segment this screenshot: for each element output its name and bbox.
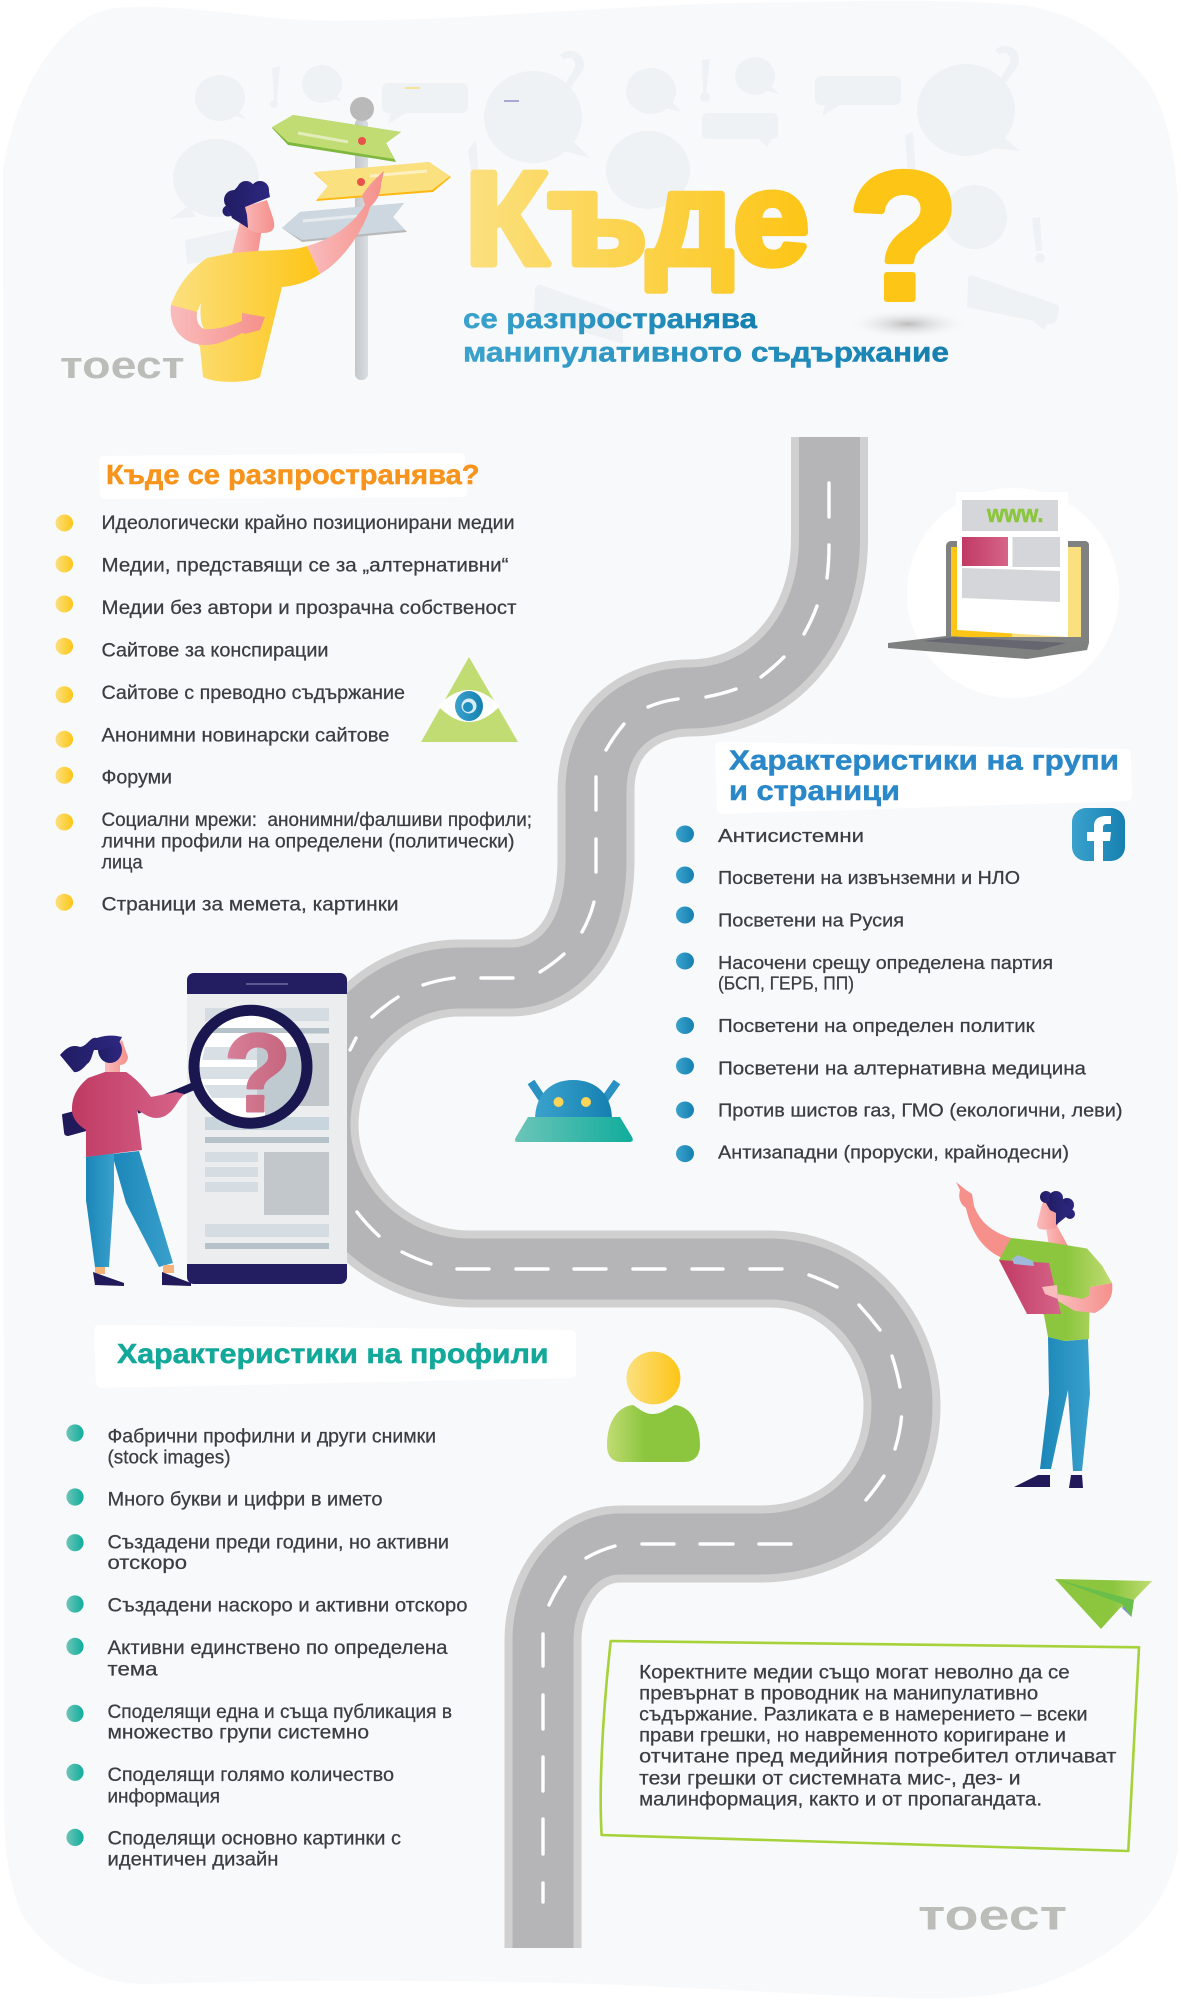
list: where: Страници за мемета, картинки — [102, 895, 398, 916]
subtitle: се разпространява — [463, 303, 757, 334]
icon: facebook — [1072, 808, 1125, 861]
panel: groups and pages — [676, 744, 1127, 1163]
icon: profile person — [607, 1352, 700, 1462]
phone — [187, 973, 347, 1284]
callout text: тези грешки от системната мис-, дез- и — [639, 1768, 1021, 1789]
pants — [1040, 1337, 1090, 1471]
list: profiles: Споделящи основно картинки с — [108, 1829, 401, 1850]
callout text: прави грешки, но навременното коригиране и — [639, 1726, 1066, 1747]
icon: laptop with website — [888, 488, 1119, 698]
magnifier handle — [137, 1086, 194, 1110]
callout border — [601, 1641, 1139, 1851]
list: groups: Против шистов газ, ГМО (екологични, леви) — [718, 1100, 1122, 1120]
callout text: превърнат в проводник на манипулативно — [639, 1683, 1038, 1704]
list: where: Сайтове за конспирации — [102, 640, 328, 662]
list: profiles: отскоро — [108, 1553, 187, 1574]
list: profiles: тема — [108, 1660, 158, 1680]
pole — [350, 97, 374, 380]
man: shirt — [171, 246, 320, 382]
illustration: man with clipboard — [956, 1182, 1112, 1488]
list: profiles: идентичен дизайн — [108, 1850, 278, 1871]
bullets: teal — [66, 1424, 84, 1846]
clipboard — [999, 1255, 1061, 1314]
hair — [1040, 1191, 1075, 1225]
list: where: лични профили на определени (политически) — [102, 831, 514, 852]
title: question mark: ? — [848, 134, 959, 338]
sign: yellow — [314, 162, 451, 201]
list: groups: Посветени на Русия — [718, 911, 904, 931]
list: where: Анонимни новинарски сайтове — [102, 725, 390, 746]
callout text: малинформация, както и от пропагандата. — [639, 1789, 1042, 1810]
list: groups: Антисистемни — [718, 826, 864, 846]
shadow under question mark — [846, 309, 970, 339]
logo: bottom: тоест — [918, 1892, 1067, 1940]
list: groups: Посветени на определен политик — [718, 1016, 1035, 1036]
neck and face — [1037, 1196, 1068, 1248]
list: groups: Антизападни (проруски, крайнодесни) — [718, 1143, 1069, 1163]
list: where: Медии, представящи се за „алтернативни“ — [102, 556, 508, 576]
road — [320, 437, 902, 1948]
speech bubbles background — [170, 46, 1059, 344]
man: lower arm — [171, 305, 265, 345]
list: profiles: Фабрични профилни и други снимки — [108, 1426, 436, 1448]
list: profiles: информация — [108, 1787, 220, 1808]
gap between arm and torso — [197, 303, 204, 329]
man: neck and face — [232, 200, 274, 257]
icon: android ufo — [515, 1080, 633, 1142]
logo: top: тоест — [60, 345, 184, 387]
woman: legs — [86, 1151, 173, 1267]
list: where: Идеологически крайно позиционирани медии — [102, 513, 514, 534]
callout text: съдържание. Разликата е в намерението – всеки — [639, 1704, 1088, 1725]
lower arm — [1058, 1283, 1112, 1313]
panel: profiles — [66, 1330, 700, 1871]
list: where: Форуми — [102, 768, 172, 789]
heading: where: Къде се разпространява? — [106, 459, 480, 490]
woman: torso — [72, 1072, 184, 1157]
bullets: blue — [676, 826, 694, 1162]
list: profiles: Създадени наскоро и активни отскоро — [108, 1596, 468, 1617]
callout — [601, 1641, 1139, 1851]
woman: shoes — [93, 1265, 191, 1286]
list: profiles: Създадени преди години, но активни — [108, 1532, 449, 1554]
woman: face — [105, 1040, 128, 1073]
sign: green — [272, 115, 401, 162]
shoes — [1014, 1475, 1083, 1488]
small dashes — [405, 87, 519, 102]
list: groups: Насочени срещу определена партия — [718, 953, 1053, 973]
subtitle: манипулативното съдържание — [463, 336, 949, 368]
panel: where it spreads — [56, 458, 532, 916]
list: profiles: (stock images) — [108, 1448, 230, 1468]
callout text — [639, 1662, 1117, 1810]
woman: hair — [60, 1036, 122, 1072]
list: where: Сайтове с преводно съдържание — [102, 683, 405, 704]
bullets: yellow — [56, 514, 73, 911]
icon: eye triangle — [421, 657, 518, 742]
list: profiles: Активни единствено по определена — [108, 1638, 448, 1659]
list: where: лица — [102, 853, 143, 874]
title: kade: Къде — [465, 145, 809, 292]
lens — [194, 1010, 307, 1135]
green shirt — [999, 1238, 1112, 1341]
raised arm — [956, 1182, 1011, 1258]
list: profiles — [108, 1426, 468, 1871]
list: where — [102, 513, 532, 916]
list: groups: (БСП, ГЕРБ, ПП) — [718, 974, 854, 994]
man: raised arm — [307, 171, 384, 274]
icon: paper plane — [1055, 1579, 1152, 1629]
subtitle — [463, 303, 949, 368]
list: profiles: Споделящи една и съща публикация в — [108, 1702, 452, 1723]
heading: profiles: Характеристики на профили — [117, 1338, 548, 1369]
woman: bag — [63, 1109, 86, 1135]
list: groups: Посветени на извънземни и НЛО — [718, 868, 1020, 888]
list: where: Медии без автори и прозрачна собственост — [102, 598, 517, 619]
man: hair — [222, 181, 270, 228]
sign: grey — [282, 203, 407, 242]
heading: groups — [720, 744, 1127, 809]
list: profiles: Много букви и цифри в името — [108, 1490, 382, 1511]
callout text: Коректните медии също могат неволно да се — [639, 1662, 1070, 1683]
callout text: отчитане пред медийния потребител отличават — [639, 1747, 1117, 1768]
list: profiles: множество групи системно — [108, 1723, 369, 1744]
question mark on lens: ? — [224, 1012, 291, 1135]
title — [463, 134, 970, 368]
list: groups: Посветени на алтернативна медицина — [718, 1058, 1087, 1078]
heading: groups: и страници — [729, 775, 900, 806]
list: profiles: Споделящи голямо количество — [108, 1765, 394, 1786]
heading: groups: Характеристики на групи — [729, 744, 1119, 776]
list: where: Социални мрежи: анонимни/фалшиви профили; — [102, 810, 532, 831]
list: groups — [718, 826, 1122, 1163]
www label: www. — [986, 501, 1044, 528]
heading: profiles — [99, 1330, 571, 1383]
illustration: phone with woman and magnifier — [60, 973, 347, 1286]
illustration: man at signpost — [171, 97, 451, 382]
